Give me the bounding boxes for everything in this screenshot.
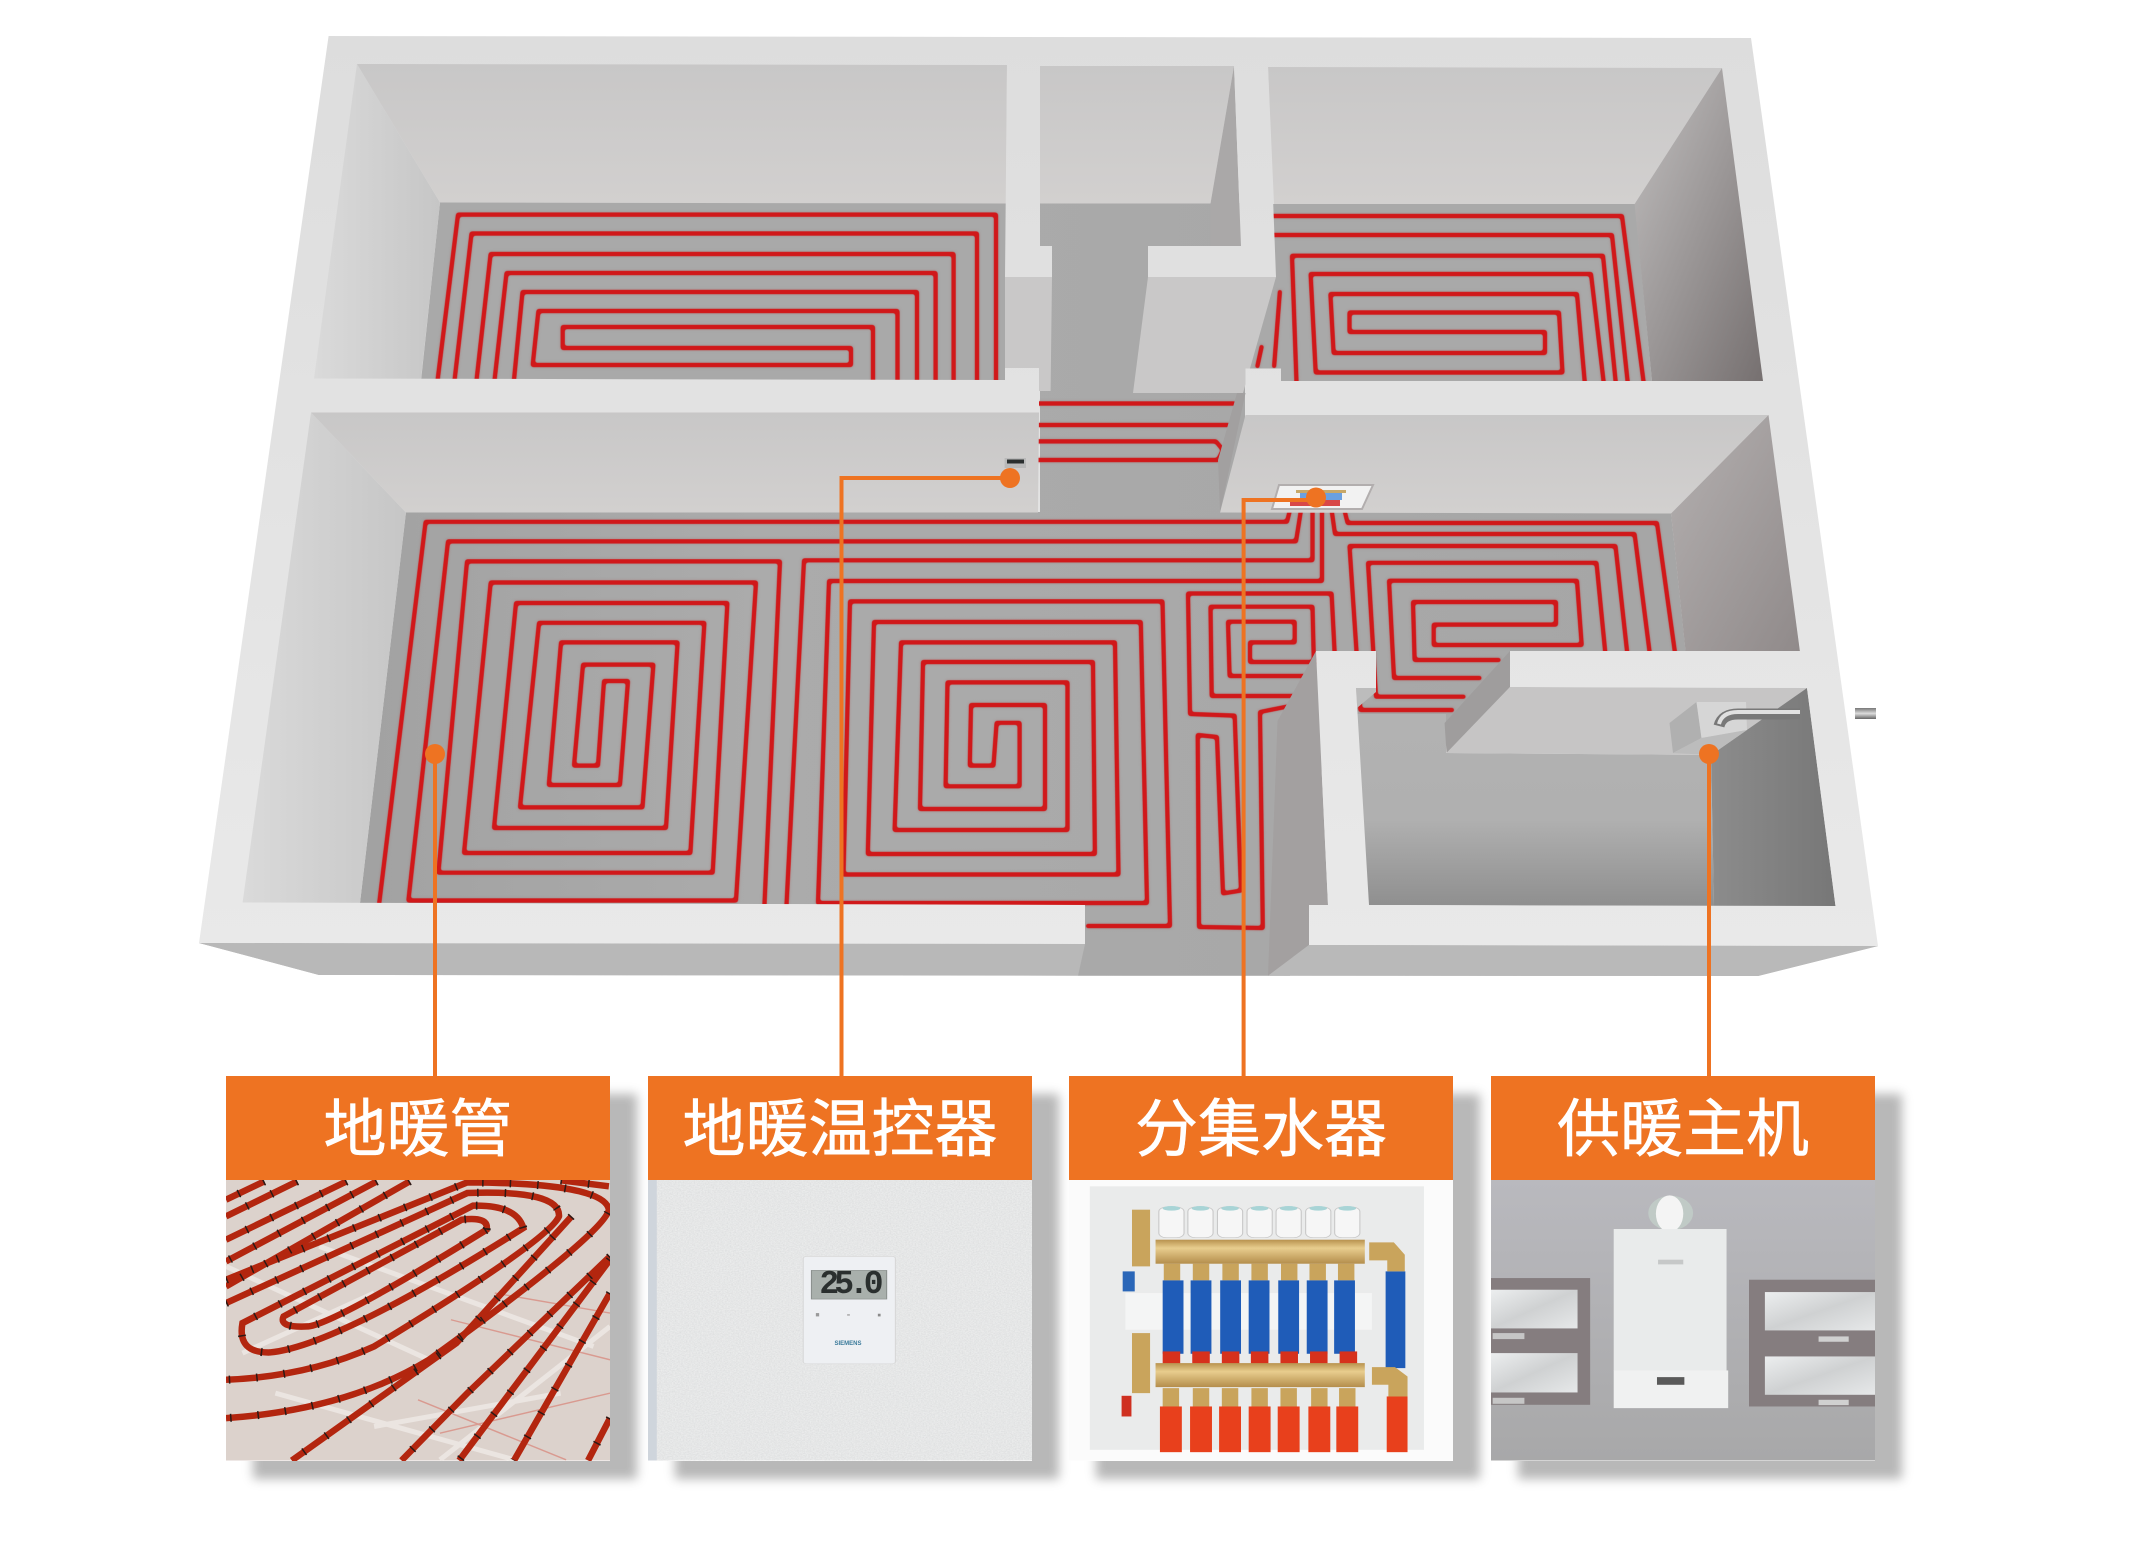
heading: 分集水器 (1069, 1076, 1453, 1180)
front face of left wall (199, 943, 1085, 976)
building front face (199, 943, 1878, 976)
wall stub face (1005, 277, 1052, 391)
closet front face (1133, 277, 1276, 393)
card: manifold (1069, 1076, 1453, 1460)
photo: wall-mounted boiler (1491, 1180, 1875, 1460)
corridor back wall (1040, 66, 1241, 246)
callout line: thermostat (842, 468, 1020, 1076)
floor: room C (1245, 204, 1652, 381)
card: boiler (1491, 1076, 1875, 1460)
external pipe outlet (1855, 708, 1876, 719)
room E floor and walls (1268, 651, 1836, 976)
thermostat display value: 25.0 (819, 1266, 879, 1303)
room A walls (314, 64, 1007, 379)
thermostat on wall (1005, 458, 1026, 468)
heading: 供暖主机 (1491, 1076, 1875, 1180)
callout line: boiler (1699, 744, 1719, 1076)
callout line: manifold (1244, 488, 1326, 1076)
callout line: floor pipe (425, 744, 445, 1076)
front face right (1268, 945, 1878, 976)
card: floor heating pipe (226, 1076, 610, 1460)
room E wall tops (1309, 651, 1878, 946)
room D walls (1218, 393, 1800, 652)
thermostat brand: SIEMENS (834, 1341, 862, 1347)
heading: 地暖管 (226, 1076, 610, 1180)
boiler on wall (1670, 702, 1800, 755)
heading: 地暖管: 地暖管 (324, 1095, 512, 1165)
floor heating pipes (379, 215, 1676, 928)
heading: 供暖主机: 供暖主机 (1557, 1095, 1809, 1165)
floor: room A (421, 202, 1006, 381)
heading: 地暖温控器 (648, 1076, 1032, 1180)
photo: wall thermostat (648, 1180, 1032, 1460)
manifold on wall (1272, 485, 1373, 509)
card: thermostat (648, 1076, 1032, 1460)
heading: 地暖温控器: 地暖温控器 (682, 1095, 998, 1165)
room C walls (1268, 67, 1763, 381)
floor: central and large rooms (360, 203, 1686, 976)
photo: red pipes on foil (226, 1180, 610, 1461)
room B walls (242, 412, 1039, 903)
heading: 分集水器: 分集水器 (1135, 1095, 1387, 1165)
building top face (199, 36, 1878, 946)
photo: brass manifold in cabinet (1090, 1186, 1424, 1452)
wall tops (199, 64, 1768, 944)
